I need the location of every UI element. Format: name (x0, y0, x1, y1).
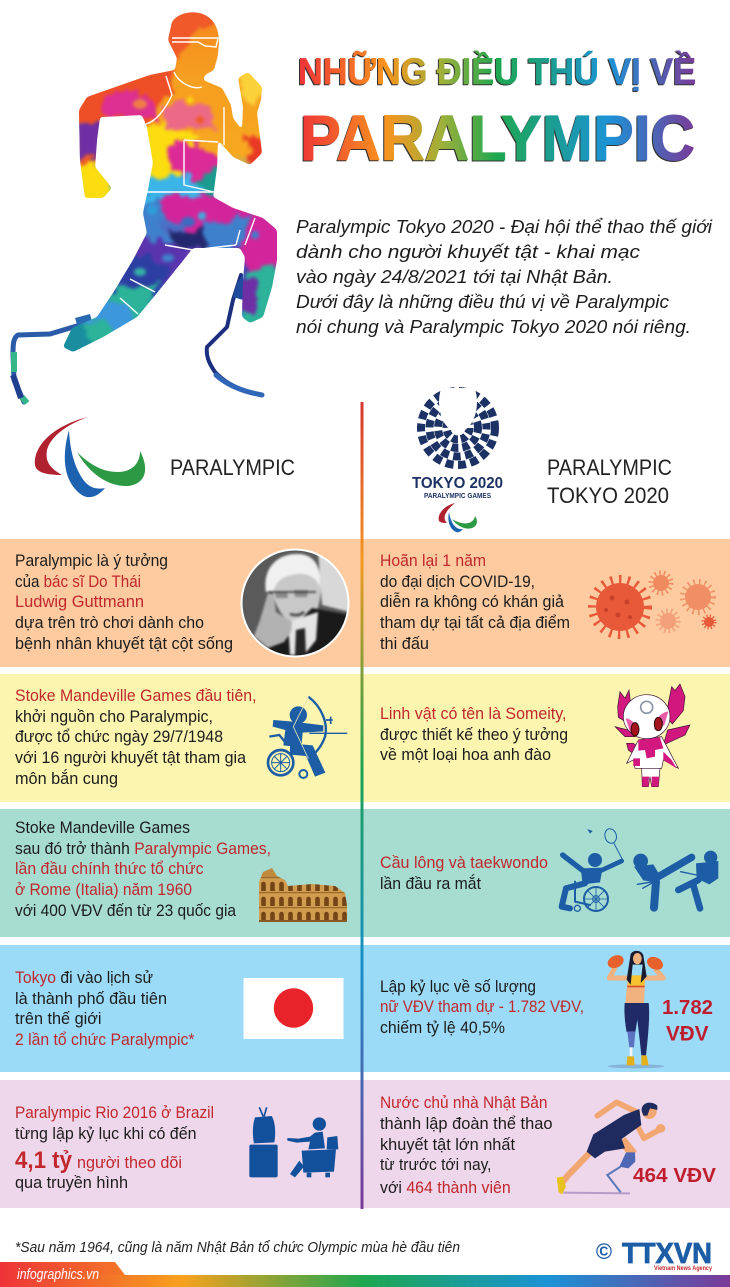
label: paralympic tokyo 2020: TOKYO 2020 (547, 483, 669, 508)
icon: person watching television (249, 1107, 338, 1177)
illustration: colourful paralympic runner (13, 5, 285, 403)
intro paragraph: nói chung và Paralympic Tokyo 2020 nói riêng. (296, 316, 691, 337)
text: first Stoke Mandeville Games: môn bắn cung (15, 769, 118, 788)
band: pink row (0, 1080, 730, 1208)
icon: Colosseum (259, 862, 347, 922)
icon: Japanese flag (244, 978, 344, 1039)
centre rainbow divider (360, 402, 364, 1209)
agency caption: Vietnam News Agency (654, 1265, 712, 1272)
icon: mascot Someity (615, 684, 690, 787)
text: host Japan largest delegation: Nước chủ nhà Nhật Bản (380, 1093, 548, 1112)
photo: Ludwig Guttmann portrait (240, 548, 350, 660)
text: first Stoke Mandeville Games: khởi nguồn cho Paralympic, (15, 707, 213, 726)
footer tab with site name: infographics.vn (17, 1266, 99, 1283)
text: becomes Paralympic Games (15, 818, 271, 920)
text: Rio 2016 record audience: người theo dõi (77, 1153, 182, 1172)
text: Tokyo enters history (15, 968, 195, 1049)
intro paragraph: Paralympic Tokyo 2020 - Đại hội thể thao thế giới (296, 216, 713, 237)
text: postponed one year: tham dự tại tất cả địa điểm (380, 613, 570, 632)
text: guttmann idea (15, 551, 233, 653)
logo: TTXVN (596, 1238, 712, 1272)
label: paralympic tokyo 2020 (547, 455, 672, 508)
title (298, 50, 696, 174)
intro paragraph (296, 216, 713, 337)
text: guttmann idea: Ludwig Guttmann (15, 592, 144, 611)
text: mascot Someity: về một loại hoa anh đào (380, 745, 551, 764)
icon: female athlete with boxing gloves (606, 951, 665, 1068)
text: record women athletes (380, 977, 584, 1037)
icon: wheelchair badminton and taekwondo (562, 827, 718, 911)
left running blade (13, 322, 90, 402)
text: guttmann idea: Paralympic là ý tưởng (15, 551, 168, 570)
text: postponed one year: do đại dịch COVID-19, (380, 572, 535, 591)
text: Tokyo enters history: 2 lần tổ chức Paralympic* (15, 1030, 195, 1049)
text: postponed one year: diễn ra không có khán giả (380, 592, 565, 611)
text: mascot Someity: Linh vật có tên là Someity, (380, 704, 566, 723)
text: mascot Someity (380, 704, 568, 764)
icon: sprinter with prosthetic leg (557, 1102, 665, 1194)
text: host Japan largest delegation: khuyết tật lớn nhất (380, 1135, 515, 1154)
footnote: *Sau năm 1964, cũng là năm Nhật Bản tổ chức Olympic mùa hè đầu tiên (15, 1239, 460, 1256)
text: postponed one year: Hoãn lại 1 năm (380, 551, 486, 570)
label: paralympic tokyo 2020: PARALYMPIC (547, 455, 672, 480)
footer tab with site name (0, 1262, 125, 1283)
band: yellow row (0, 674, 730, 802)
text: first Stoke Mandeville Games: với 16 người khuyết tật tham gia (15, 748, 247, 767)
text: Rio 2016 record audience: qua truyền hình (15, 1173, 128, 1192)
intro paragraph: Dưới đây là những điều thú vị về Paralympic (296, 291, 670, 312)
text: first Stoke Mandeville Games (15, 686, 256, 788)
text: becomes Paralympic Games: lần đầu chính thức tổ chức (15, 859, 204, 878)
text: becomes Paralympic Games: sau đó trở thành Paralympic Games, (15, 839, 271, 858)
label: paralympic: PARALYMPIC (170, 455, 295, 480)
text: host Japan largest delegation: với 464 thành viên (380, 1178, 511, 1197)
text: postponed one year: thi đấu (380, 634, 429, 653)
text: Tokyo enters history: trên thế giới (15, 1009, 102, 1028)
sub wordmark: PARALYMPIC GAMES (424, 491, 491, 500)
band: peach row (0, 539, 730, 667)
text: Rio 2016 record audience: 4,1 tỷ (15, 1147, 73, 1174)
text: postponed one year (380, 551, 570, 653)
emblem: checkered wreath (421, 391, 495, 465)
text: first Stoke Mandeville Games: Stoke Mandeville Games đầu tiên, (15, 686, 256, 705)
text: badminton and taekwondo (380, 853, 548, 893)
intro paragraph: vào ngày 24/8/2021 tới tại Nhật Bản. (296, 266, 613, 287)
text: Tokyo enters history: Tokyo đi vào lịch sử (15, 968, 153, 987)
footer rainbow bar (0, 1275, 730, 1287)
icon: wheelchair archer (268, 697, 347, 778)
right running blade (207, 275, 262, 395)
text: Tokyo enters history: là thành phố đầu tiên (15, 989, 167, 1008)
band: teal row (0, 809, 730, 937)
stat: 1.782 athletes (662, 997, 713, 1046)
icon: coronavirus particles (593, 573, 715, 634)
band: blue row (0, 945, 730, 1072)
text: becomes Paralympic Games: ở Rome (Italia) năm 1960 (15, 880, 192, 899)
text: first Stoke Mandeville Games: được tổ chức ngày 29/7/1948 (15, 727, 223, 746)
text: record women athletes: Lập kỷ lục về số lượng (380, 977, 536, 996)
text: guttmann idea: bệnh nhân khuyết tật cột sống (15, 634, 233, 653)
small agitos (439, 503, 477, 532)
text: mascot Someity: được thiết kế theo ý tưởng (380, 725, 568, 744)
text: host Japan largest delegation (380, 1093, 552, 1197)
icon: paralympic agitos logo (35, 417, 145, 497)
text: badminton and taekwondo: Cầu lông và taekwondo (380, 853, 548, 872)
text: badminton and taekwondo: lần đầu ra mắt (380, 874, 481, 893)
title line 2: PARALYMPIC (300, 102, 695, 174)
text: guttmann idea: của bác sĩ Do Thái (15, 572, 141, 591)
text: becomes Paralympic Games: với 400 VĐV đến từ 23 quốc gia (15, 901, 236, 920)
white body lines and glasses (120, 38, 255, 314)
stat: 1.782 athletes: VĐV (666, 1022, 708, 1046)
stat: 1.782 athletes: 1.782 (662, 997, 713, 1019)
title line 1: NHỮNG ĐIỀU THÚ VỊ VỀ (298, 50, 696, 92)
runner body with paint splashes (64, 12, 277, 352)
text: guttmann idea: dựa trên trò chơi dành cho (15, 613, 204, 632)
text: becomes Paralympic Games: Stoke Mandeville Games (15, 818, 190, 837)
logo: tokyo 2020 paralympic games (412, 391, 503, 532)
stat: 464 athletes: 464 VĐV (633, 1165, 717, 1187)
text: record women athletes: chiếm tỷ lệ 40,5% (380, 1018, 505, 1037)
wordmark: TOKYO 2020 (412, 475, 503, 492)
text: Rio 2016 record audience (15, 1103, 214, 1192)
text: Rio 2016 record audience: từng lập kỷ lục khi có đến (15, 1124, 196, 1143)
agency wordmark: TTXVN (622, 1238, 712, 1270)
text: host Japan largest delegation: từ trước tới nay, (380, 1155, 492, 1174)
text: record women athletes: nữ VĐV tham dự - 1.782 VĐV, (380, 997, 584, 1016)
text: host Japan largest delegation: thành lập đoàn thể thao (380, 1114, 552, 1133)
text: Rio 2016 record audience: Paralympic Rio 2016 ở Brazil (15, 1103, 214, 1122)
copyright mark: © (596, 1239, 612, 1264)
intro paragraph: dành cho người khuyết tật - khai mạc (296, 241, 641, 262)
